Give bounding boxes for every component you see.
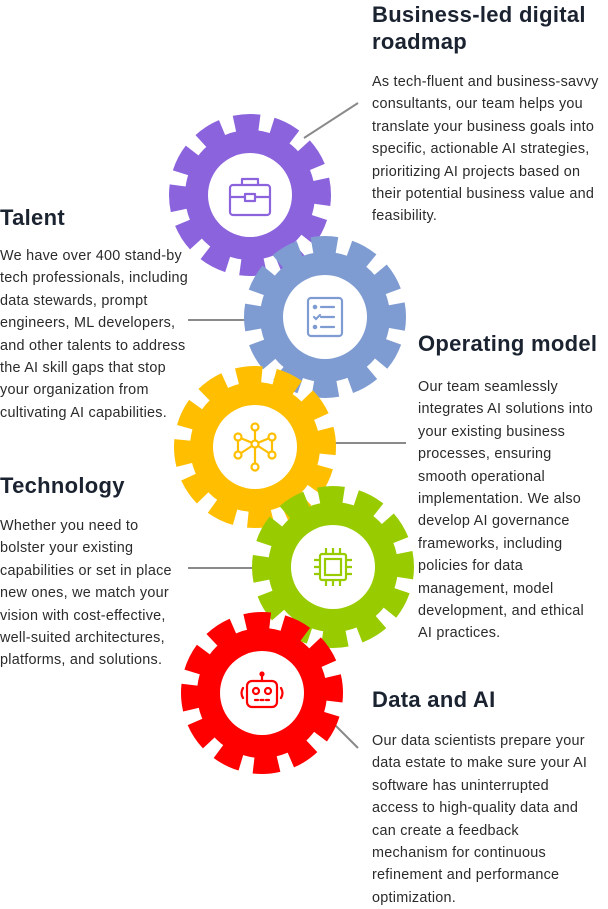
text: operating model body: processes, ensuring [418, 446, 552, 462]
icon: chip [314, 548, 352, 586]
text: operating model body: policies for data [418, 558, 523, 574]
text: roadmap body: consultants, our team helps you [372, 96, 583, 112]
text: data and AI body: access to high-quality data and [372, 800, 578, 816]
heading: Operating model: Operating model [418, 331, 597, 356]
text: technology body: bolster your existing [0, 540, 133, 556]
heading: Talent: Talent [0, 205, 65, 230]
text: roadmap body: feasibility. [372, 208, 437, 224]
icon: robot [242, 672, 282, 707]
text: operating model body: development, and ethical [418, 603, 584, 619]
text: roadmap body: translate your business goals into [372, 119, 594, 135]
text: roadmap body: As tech-fluent and business-savvy [372, 74, 599, 90]
text: operating model body [418, 379, 593, 641]
text: technology body: new ones, we match your [0, 585, 169, 601]
connector: talent [188, 319, 250, 321]
heading: Data and AI: Data and AI [372, 687, 496, 712]
text: data and AI body: refinement and performance [372, 867, 559, 883]
gear: yellow [168, 360, 342, 534]
connector: data and AI [335, 725, 358, 748]
text: data and AI body: software has uninterrupted [372, 778, 549, 794]
text: talent body: engineers, ML developers, [0, 315, 175, 331]
gear: purple [165, 110, 335, 280]
connector: operating model [320, 442, 406, 444]
text: data and AI body: can create a feedback [372, 823, 519, 839]
icon: briefcase [230, 179, 270, 215]
heading: Business-led digital roadmap: Business-led digital [372, 2, 586, 27]
text: technology body: platforms, and solutions. [0, 652, 162, 668]
gear: red [176, 607, 348, 779]
text: roadmap body: their potential business value and [372, 186, 594, 202]
text: talent body: the AI skill gaps that stop [0, 360, 166, 376]
text: talent body [0, 248, 188, 421]
text: roadmap body [372, 74, 599, 224]
text: talent body: and other talents to address [0, 338, 185, 354]
text: operating model body: Our team seamlessly [418, 379, 558, 395]
text: data and AI body [372, 733, 587, 906]
text: technology body: Whether you need to [0, 518, 138, 534]
text: operating model body: frameworks, including [418, 536, 562, 552]
text: technology body: capabilities or set in place [0, 563, 172, 579]
heading: Technology: Technology [0, 473, 125, 498]
text: operating model body: integrates AI solutions into [418, 401, 593, 417]
text: operating model body: management, model [418, 581, 553, 597]
icon: network [234, 424, 276, 470]
text: data and AI body: Our data scientists prepare your [372, 733, 585, 749]
text: roadmap body: specific, actionable AI strategies, [372, 141, 590, 157]
text: talent body: your organization from [0, 382, 149, 398]
text: operating model body: smooth operational [418, 469, 545, 485]
text: talent body: cultivating AI capabilities. [0, 405, 167, 421]
heading: Business-led digital roadmap: roadmap [372, 29, 467, 54]
text: data and AI body: data estate to make sure your AI [372, 755, 587, 771]
gear: green [249, 483, 417, 651]
icon: checklist [308, 298, 342, 336]
text: talent body: data stewards, prompt [0, 293, 148, 309]
text: technology body: vision with cost-effective, [0, 608, 166, 624]
heading: Business-led digital roadmap [372, 2, 586, 54]
text: talent body: tech professionals, including [0, 270, 188, 286]
text: technology body [0, 518, 172, 668]
text: operating model body: your existing business [418, 424, 565, 440]
gear: blue [242, 234, 408, 400]
text: technology body: well-suited architectures, [0, 630, 165, 646]
text: data and AI body: mechanism for continuous [372, 845, 546, 861]
text: operating model body: AI practices. [418, 625, 500, 641]
text: roadmap body: prioritizing AI projects based on [372, 164, 580, 180]
text: operating model body: implementation. We also [418, 491, 581, 507]
connector: roadmap [304, 103, 358, 138]
text: data and AI body: optimization. [372, 890, 456, 906]
text: operating model body: develop AI governance [418, 513, 570, 529]
connector: technology [188, 567, 260, 569]
text: talent body: We have over 400 stand-by [0, 248, 182, 264]
